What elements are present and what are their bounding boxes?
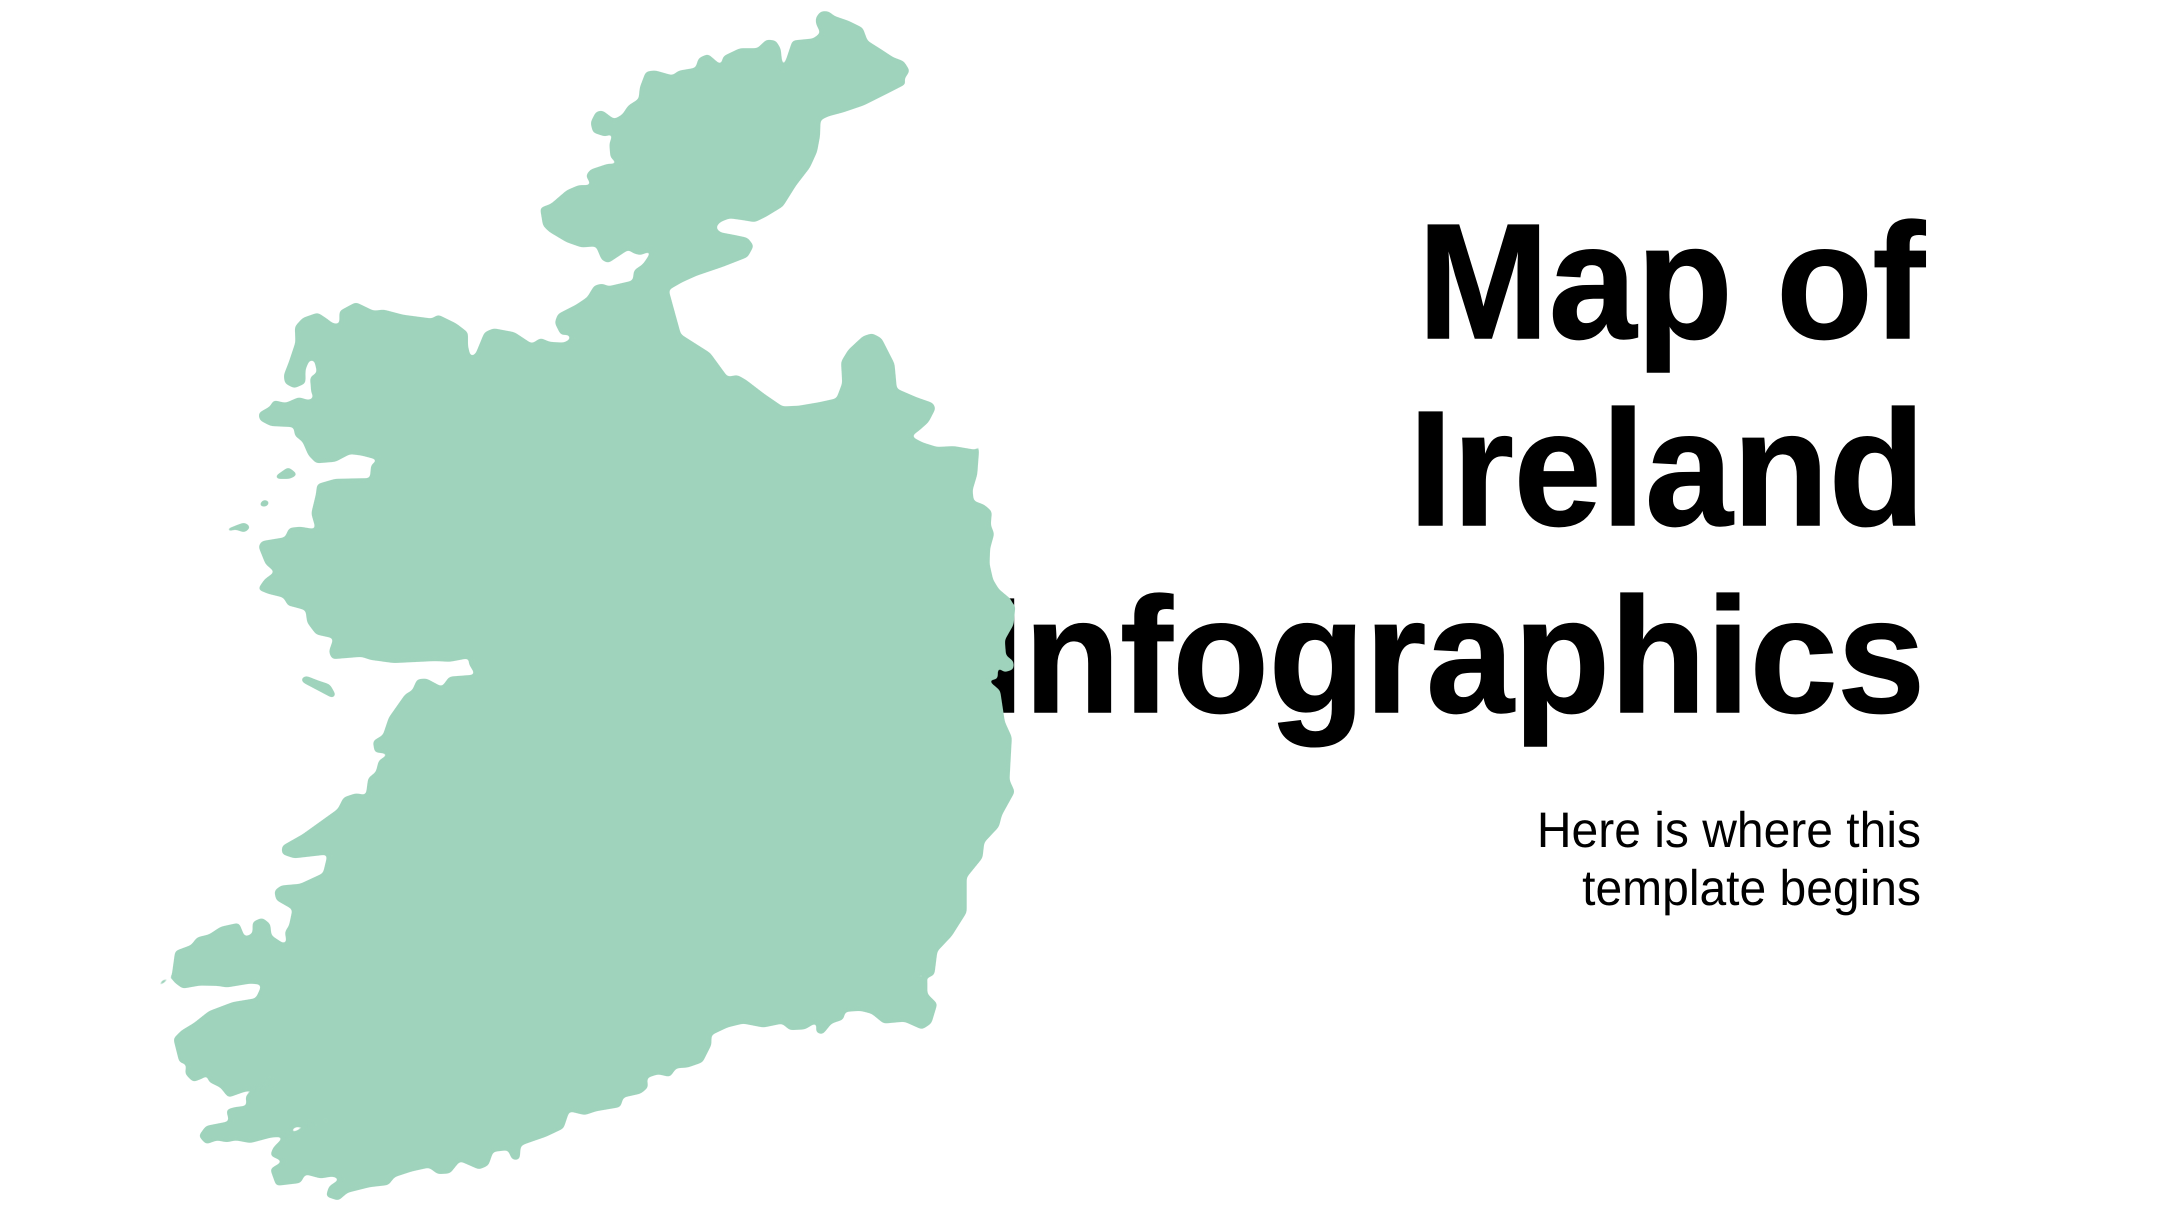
subtitle: template begins [1582, 860, 1921, 916]
title [980, 190, 1926, 748]
title: Map of [1418, 190, 1925, 373]
subtitle: Here is where this [1537, 802, 1921, 858]
title: Ireland [1409, 377, 1925, 560]
subtitle [1537, 802, 1921, 916]
title: Infographics [980, 564, 1925, 747]
